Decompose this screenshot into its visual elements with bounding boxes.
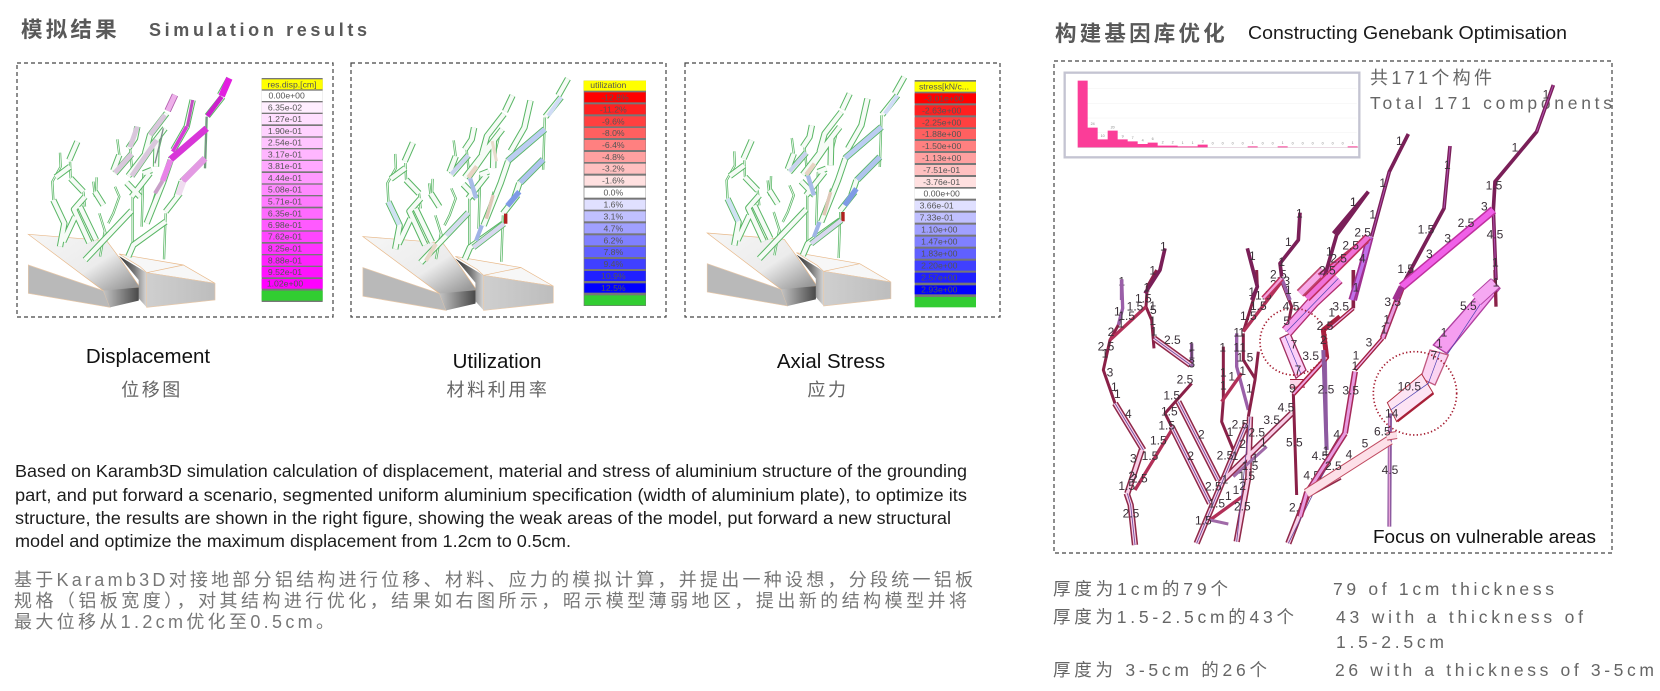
thickness labels: lower left: 1 bbox=[1246, 382, 1253, 396]
legend: stress scale: -7.51e-01 bbox=[923, 165, 960, 175]
thickness labels: upper right: 1 bbox=[1444, 158, 1451, 172]
thickness labels: lower left: 2.5 bbox=[1177, 372, 1194, 386]
thickness labels: lower left: 4.5 bbox=[1303, 468, 1320, 482]
legend: stress scale: -1.13e+00 bbox=[922, 153, 961, 163]
thickness labels: lower left: 1 bbox=[1220, 366, 1227, 380]
legend: stress scale: -3.76e-01 bbox=[923, 177, 960, 187]
thickness labels: lower left: 4 bbox=[1125, 407, 1132, 421]
thickness labels: lower right: 1 bbox=[1328, 306, 1335, 320]
thickness labels: lower right: 3.5 bbox=[1332, 300, 1349, 314]
caption: utilization bbox=[446, 350, 550, 400]
thickness labels: lower left: 1 bbox=[1220, 378, 1227, 392]
thickness labels: lower right: 10.5 bbox=[1398, 380, 1421, 394]
thickness labels: upper right: 1 bbox=[1512, 140, 1519, 154]
legend: displacement scale: 8.88e-01 bbox=[268, 255, 302, 265]
thickness labels: upper right: 1 bbox=[1369, 207, 1376, 221]
bar chart: component count histogram: 0 bbox=[1262, 142, 1264, 146]
legend: utilization scale: -11.2% bbox=[600, 104, 627, 114]
thickness labels: lower left: 1 bbox=[1233, 341, 1240, 355]
thickness labels: lower left: 8.5 bbox=[1307, 276, 1324, 290]
bar chart: component count histogram: 0 bbox=[1312, 142, 1314, 146]
bar chart: component count histogram: 0 bbox=[1332, 142, 1334, 146]
text: total components: 共171个构件 bbox=[1370, 68, 1492, 88]
legend: stress scale: 1.83e+00 bbox=[921, 249, 958, 259]
thickness labels: lower left: 2 bbox=[1270, 278, 1277, 292]
legend: utilization scale: 12.5% bbox=[601, 283, 626, 293]
thickness labels: lower right: 5.5 bbox=[1460, 299, 1477, 313]
thickness labels: upper left: 1 bbox=[1143, 281, 1150, 295]
legend: stress scale: 7.33e-01 bbox=[920, 213, 954, 223]
caption: axial stress: Axial Stress bbox=[777, 350, 885, 373]
bar chart: component count histogram: 10 bbox=[1101, 134, 1105, 138]
thickness labels: lower left: 2.5 bbox=[1289, 501, 1306, 515]
legend: displacement scale: res.disp.[cm] bbox=[267, 79, 317, 89]
bar chart: component count histogram: 1 bbox=[1352, 141, 1354, 145]
thickness labels: upper right: 1.5 bbox=[1397, 262, 1414, 276]
thickness labels: upper right: 3 bbox=[1481, 199, 1488, 213]
thickness labels: lower left: 1 bbox=[1188, 340, 1195, 354]
thickness labels: lower left: 2 bbox=[1320, 333, 1327, 347]
legend: displacement scale: 0.00e+00 bbox=[268, 91, 305, 101]
thickness labels: upper right: 1 bbox=[1492, 256, 1499, 270]
model: axial stress structure on terrain bbox=[707, 77, 904, 306]
bar chart: component count histogram: 0 bbox=[1212, 142, 1214, 146]
thickness labels: lower left: 1 bbox=[1114, 387, 1121, 401]
legend: utilization scale: -6.4% bbox=[602, 140, 625, 150]
legend: displacement scale bbox=[262, 78, 323, 302]
legend: displacement scale: 6.35e-02 bbox=[268, 102, 302, 112]
title: constructing genebank optimisation: 构建基因库优化 bbox=[1055, 22, 1228, 46]
thickness labels: upper left: 1 bbox=[1278, 255, 1285, 269]
thickness labels: upper right: 1 bbox=[1543, 88, 1550, 102]
model: lower right structure with thickness labels bbox=[1300, 270, 1500, 527]
thickness labels: upper left: 2.5 bbox=[1342, 239, 1359, 253]
thickness labels: lower left: 2 bbox=[1187, 449, 1194, 463]
title: simulation results bbox=[21, 18, 367, 42]
thickness labels: lower left: 3 bbox=[1283, 274, 1290, 288]
legend: displacement scale: 3.17e-01 bbox=[268, 149, 302, 159]
thickness labels: lower left: 1.5 bbox=[1208, 496, 1225, 510]
thickness labels: lower right: 1 bbox=[1436, 336, 1443, 350]
text block: english description: structure, the results are shown in the right figure, showing the weak areas of the model, put forward a new structural bbox=[15, 508, 951, 528]
thickness labels: lower left: 1.5 bbox=[1158, 418, 1175, 432]
thickness labels: lower left: 3 bbox=[1107, 366, 1114, 380]
model: displacement structure on terrain bbox=[28, 78, 229, 307]
thickness labels: lower left: 7 bbox=[1291, 338, 1298, 352]
legend: utilization scale: -9.6% bbox=[602, 116, 625, 126]
member: 5.5 plate bbox=[1433, 279, 1500, 353]
member: thick plate in first focus circle bbox=[1280, 333, 1306, 378]
bar chart: component count histogram: 0 bbox=[1292, 142, 1294, 146]
thickness labels: lower left: 2.5 bbox=[1232, 418, 1249, 432]
thickness labels: upper left: 1 bbox=[1285, 235, 1292, 249]
bar chart: component count histogram: 1 bbox=[1192, 141, 1194, 145]
legend: utilization scale: 7.8% bbox=[603, 247, 623, 257]
legend: stress scale: 2.20e+00 bbox=[921, 261, 958, 271]
thickness labels: upper left: 1 bbox=[1285, 283, 1292, 297]
thickness labels: lower right: 1 bbox=[1383, 312, 1390, 326]
member: 7 plate bbox=[1421, 350, 1448, 385]
legend: utilization scale: utilization bbox=[590, 80, 627, 90]
bar chart: component count histogram: 7 bbox=[1132, 136, 1134, 140]
thickness labels: lower right: 3 bbox=[1366, 336, 1373, 350]
thickness labels: lower left: 5.5 bbox=[1286, 436, 1303, 450]
legend: displacement scale: 1.27e-01 bbox=[268, 114, 302, 124]
thickness labels: lower left: 2 bbox=[1198, 428, 1205, 442]
legend: utilization scale: 6.2% bbox=[603, 235, 623, 245]
thickness labels: lower left: 1 bbox=[1233, 326, 1240, 340]
thickness labels: lower left: 2 bbox=[1239, 437, 1246, 451]
thickness labels: lower left: 1 bbox=[1225, 489, 1232, 503]
thickness labels: upper left: 1 bbox=[1249, 249, 1256, 263]
thickness labels: lower right: 7 bbox=[1431, 348, 1438, 362]
legend: stress scale: 2.57e+00 bbox=[921, 273, 958, 283]
thickness labels: lower left: 9 bbox=[1289, 382, 1296, 396]
thickness labels: lower left: 3.5 bbox=[1263, 413, 1280, 427]
legend: displacement scale: 9.52e-01 bbox=[268, 267, 302, 277]
thickness labels: lower right: 3.5 bbox=[1342, 383, 1359, 397]
legend: utilization scale: 10.9% bbox=[601, 271, 626, 281]
legend: utilization scale: 1.6% bbox=[603, 200, 623, 210]
text block: english description: part, and put forward a scenario, segmented uniform aluminium specification (width of aluminium plate), to optimize its bbox=[15, 485, 967, 505]
thickness labels: upper right: 1 bbox=[1350, 195, 1357, 209]
thickness labels: lower left bbox=[1098, 268, 1329, 528]
legend: stress scale bbox=[915, 80, 976, 307]
thickness labels: upper left bbox=[1143, 195, 1371, 297]
bar chart: component count histogram: 3 bbox=[1202, 139, 1204, 143]
thickness labels: lower left: 2.5 bbox=[1217, 448, 1234, 462]
thickness labels: lower left: 1.5 bbox=[1237, 351, 1254, 365]
bar chart: component count histogram: 0 bbox=[1322, 142, 1324, 146]
thickness labels: lower right: 1 bbox=[1353, 348, 1360, 362]
legend: displacement scale: 6.35e-01 bbox=[268, 208, 302, 218]
thickness labels: lower left: 1 bbox=[1260, 436, 1267, 450]
thickness labels: lower left: 4.5 bbox=[1278, 400, 1295, 414]
legend: stress scale: -1.88e+00 bbox=[922, 129, 961, 139]
caption: axial stress: 应力 bbox=[807, 380, 849, 400]
thickness labels: upper left: 1 bbox=[1160, 240, 1167, 254]
thickness labels: upper right: 2.5 bbox=[1458, 216, 1475, 230]
thickness labels: lower left: 1 bbox=[1118, 316, 1125, 330]
text block: english description bbox=[15, 461, 967, 551]
thickness labels: lower left: 2.5 bbox=[1234, 500, 1251, 514]
thickness labels: lower left: 1 bbox=[1248, 285, 1255, 299]
thickness labels: lower right: 2.5 bbox=[1318, 382, 1335, 396]
thickness labels: lower right: 1 bbox=[1323, 444, 1330, 458]
bar chart: component count histogram: 20 bbox=[1111, 125, 1115, 129]
thickness labels: lower right: 2.5 bbox=[1325, 459, 1342, 473]
bar chart: component count histogram: 1 bbox=[1252, 141, 1254, 145]
thickness labels: lower left: 1.5 bbox=[1118, 479, 1135, 493]
thickness labels: lower left: 2.5 bbox=[1131, 471, 1148, 485]
legend: utilization scale: -1.6% bbox=[602, 176, 625, 186]
bar chart: component count histogram: 4 bbox=[1142, 139, 1144, 143]
bar chart: component count histogram: 0 bbox=[1222, 142, 1224, 146]
thickness labels: lower right: 3.5 bbox=[1384, 295, 1401, 309]
thickness labels: lower right: 1 bbox=[1353, 279, 1360, 293]
text block: chinese description: 基于Karamb3D对接地部分铝结构进行位移、材料、应力的模拟计算，并提出一种设想，分段统一铝板 bbox=[14, 570, 973, 590]
thickness labels: upper right: 4.5 bbox=[1487, 228, 1504, 242]
thickness labels: lower right: 1 bbox=[1350, 289, 1357, 303]
thickness labels: lower left: 1 bbox=[1232, 449, 1239, 463]
legend: utilization scale: -8.0% bbox=[602, 128, 625, 138]
thickness labels: lower left: 1.5 bbox=[1238, 469, 1255, 483]
text block: thickness summary: 1.5-2.5cm bbox=[1336, 632, 1444, 652]
bar chart: component count histogram: 24 bbox=[1091, 122, 1095, 126]
callout: focus on vulnerable areas: Focus on vulnerable areas bbox=[1373, 527, 1596, 547]
bar chart: component count histogram: 0 bbox=[1302, 142, 1304, 146]
caption: displacement: Displacement bbox=[86, 345, 210, 368]
bar chart: component count histogram: 0 bbox=[1272, 142, 1274, 146]
title: constructing genebank optimisation: Constructing Genebank Optimisation bbox=[1248, 23, 1567, 43]
thickness labels: lower left: 1 bbox=[1149, 314, 1156, 328]
thickness labels: lower right bbox=[1317, 279, 1477, 477]
model: lower left structure with thickness labels bbox=[1098, 268, 1340, 545]
thickness labels: lower right: 5 bbox=[1362, 436, 1369, 450]
thickness labels: lower left: 1.5 bbox=[1142, 449, 1159, 463]
legend: stress scale: -1.50e+00 bbox=[922, 141, 961, 151]
thickness labels: lower left: 3 bbox=[1130, 452, 1137, 466]
caption: displacement: 位移图 bbox=[121, 380, 183, 400]
thickness labels: lower left: 1 bbox=[1151, 324, 1158, 338]
thickness labels: lower left: 1.5 bbox=[1118, 309, 1135, 323]
text block: english description: model and optimize the maximum displacement from 1.2cm to 0.5cm. bbox=[15, 531, 571, 551]
thickness labels: lower left: 1 bbox=[1188, 348, 1195, 362]
legend: utilization scale: -3.2% bbox=[602, 164, 625, 174]
thickness labels: upper right bbox=[1350, 88, 1550, 290]
text block: thickness summary: 厚度为 3-5cm 的26个 bbox=[1053, 660, 1267, 680]
legend: stress scale: stress[kN/c... bbox=[919, 81, 969, 91]
thickness labels: lower left: 3.5 bbox=[1302, 349, 1319, 363]
thickness labels: lower left: 2.5 bbox=[1205, 480, 1222, 494]
thickness labels: upper left: 2.5 bbox=[1330, 252, 1347, 266]
text: total components bbox=[1370, 68, 1612, 113]
thickness labels: lower left: 1 bbox=[1219, 341, 1226, 355]
thickness labels: lower left: 2.5 bbox=[1270, 268, 1287, 282]
model: utilization structure on terrain bbox=[363, 79, 568, 310]
legend: displacement scale: 5.71e-01 bbox=[268, 196, 302, 206]
thickness labels: upper left: 2.5 bbox=[1319, 264, 1336, 278]
thickness labels: lower left: 1.5 bbox=[1250, 299, 1267, 313]
legend: stress scale: 1.10e+00 bbox=[921, 225, 958, 235]
thickness labels: lower left: 1 bbox=[1114, 304, 1121, 318]
thickness labels: lower left: 5 bbox=[1283, 314, 1290, 328]
thickness labels: lower left: 1.5 bbox=[1127, 300, 1144, 314]
thickness labels: upper right: 1 bbox=[1379, 176, 1386, 190]
thickness labels: lower right: 6.5 bbox=[1374, 424, 1391, 438]
bar chart: component count histogram: 6 bbox=[1152, 137, 1154, 141]
legend: utilization scale: 3.1% bbox=[603, 211, 623, 221]
bar chart: component count histogram: 0 bbox=[1342, 142, 1344, 146]
thickness labels: lower left: 1.5 bbox=[1255, 288, 1272, 302]
thickness labels: lower left: 1.5 bbox=[1242, 459, 1259, 473]
bar chart: component count histogram: 1 bbox=[1182, 141, 1184, 145]
text block: chinese description bbox=[14, 570, 973, 632]
legend: displacement scale: 1.02e+00 bbox=[267, 279, 303, 289]
thickness labels: lower left: 1 bbox=[1228, 370, 1235, 384]
panel: axial stress bbox=[685, 63, 1000, 317]
thickness labels: lower left: 1 bbox=[1239, 364, 1246, 378]
bar chart: component count histogram bbox=[1065, 73, 1359, 157]
legend: utilization scale: -12.8% bbox=[601, 92, 629, 102]
thickness labels: lower left: 3 bbox=[1188, 356, 1195, 370]
thickness labels: lower left: 1 bbox=[1233, 483, 1240, 497]
legend: displacement scale: 4.44e-01 bbox=[268, 173, 302, 183]
model: upper right structure with thickness labels bbox=[1320, 85, 1553, 300]
thickness labels: upper left: 1 bbox=[1296, 206, 1303, 220]
thickness labels: upper left: 1 bbox=[1353, 281, 1360, 295]
bar chart: component count histogram: 2 bbox=[1162, 140, 1164, 144]
thickness labels: lower left: 1 bbox=[1238, 326, 1245, 340]
caption: utilization: 材料利用率 bbox=[446, 380, 550, 400]
thickness labels: lower right: 1 bbox=[1441, 326, 1448, 340]
bar chart: component count histogram: 2 bbox=[1172, 140, 1174, 144]
legend: displacement scale: 5.08e-01 bbox=[268, 185, 302, 195]
thickness labels: lower right: 2.5 bbox=[1317, 319, 1334, 333]
thickness labels: lower left: 2.5 bbox=[1164, 333, 1181, 347]
title: constructing genebank optimisation bbox=[1055, 22, 1567, 46]
thickness labels: lower left: 1.5 bbox=[1163, 388, 1180, 402]
thickness labels: lower left: 1 bbox=[1111, 380, 1118, 394]
caption: utilization: Utilization bbox=[453, 350, 541, 373]
thickness labels: lower left: 2.5 bbox=[1098, 340, 1115, 354]
thickness labels: upper right: 1.5 bbox=[1418, 222, 1435, 236]
legend: stress scale: 3.66e-01 bbox=[920, 201, 954, 211]
text block: chinese description: 规格（铝板宽度），对其结构进行优化，结果如右图所示，昭示模型薄弱地区，提出新的结构模型并将 bbox=[14, 591, 967, 611]
thickness labels: upper right: 1 bbox=[1396, 134, 1403, 148]
legend: stress scale: 2.93e+00 bbox=[921, 285, 958, 295]
thickness labels: lower left: 1 bbox=[1222, 472, 1229, 486]
thickness labels: lower left: 2.5 bbox=[1123, 506, 1140, 520]
legend: stress scale: 0.00e+00 bbox=[923, 189, 960, 199]
legend: displacement scale: 3.81e-01 bbox=[268, 161, 302, 171]
panel: utilization bbox=[351, 63, 666, 317]
legend: stress scale: -3.01e+00 bbox=[924, 93, 964, 103]
thickness labels: upper right: 1.5 bbox=[1486, 179, 1503, 193]
thickness labels: upper left: 1 bbox=[1326, 244, 1333, 258]
legend: stress scale: -2.63e+00 bbox=[922, 105, 961, 115]
thickness labels: lower left: 1 bbox=[1102, 346, 1109, 360]
bar chart: component count histogram: 1 bbox=[1282, 141, 1284, 145]
thickness labels: lower right: 14 bbox=[1385, 406, 1399, 420]
thickness labels: upper left: 4 bbox=[1359, 252, 1366, 266]
panel: displacement bbox=[17, 63, 333, 317]
text block: thickness summary: 厚度为1cm的79个 bbox=[1053, 579, 1228, 599]
thickness labels: lower left: 1 bbox=[1239, 341, 1246, 355]
text: total components: Total 171 components bbox=[1370, 93, 1612, 113]
legend: displacement scale: 2.54e-01 bbox=[268, 138, 302, 148]
legend: utilization scale bbox=[584, 80, 646, 306]
legend: displacement scale: 6.98e-01 bbox=[268, 220, 302, 230]
thickness labels: lower right: 1 bbox=[1352, 359, 1359, 373]
thickness labels: lower left: 2 bbox=[1239, 479, 1246, 493]
thickness labels: lower left: 1.5 bbox=[1195, 514, 1212, 528]
thickness labels: lower left: 5 bbox=[1150, 303, 1157, 317]
legend: utilization scale: 9.4% bbox=[603, 259, 623, 269]
caption: axial stress bbox=[777, 350, 885, 400]
thickness labels: lower left: 5 bbox=[1315, 470, 1322, 484]
text block: thickness summary: 26 with a thickness of 3-5cm bbox=[1335, 660, 1654, 680]
member: 10.5 plate bbox=[1387, 374, 1433, 422]
legend: stress scale: -2.25e+00 bbox=[922, 117, 961, 127]
panel: genebank optimisation bbox=[1054, 61, 1612, 553]
caption: displacement bbox=[86, 345, 210, 400]
legend: displacement scale: 1.90e-01 bbox=[268, 126, 302, 136]
text block: chinese description: 最大位移从1.2cm优化至0.5cm。 bbox=[14, 612, 334, 632]
thickness labels: lower left: 7 bbox=[1295, 363, 1302, 377]
thickness labels: lower left: 4.5 bbox=[1283, 300, 1300, 314]
thickness labels: lower left: 1.5 bbox=[1135, 292, 1152, 306]
text block: thickness summary bbox=[1053, 579, 1654, 680]
thickness labels: lower left: 1.5 bbox=[1150, 434, 1167, 448]
thickness labels: lower left: 2 bbox=[1108, 325, 1115, 339]
title: simulation results: Simulation results bbox=[149, 20, 367, 40]
thickness labels: upper left: 2.5 bbox=[1354, 226, 1371, 240]
thickness labels: lower left: 1 bbox=[1118, 274, 1125, 288]
text block: english description: Based on Karamb3D simulation calculation of displacement, material and stress of aluminium structure of the grounding bbox=[15, 461, 967, 481]
thickness labels: upper right: 3 bbox=[1426, 247, 1433, 261]
thickness labels: lower left: 2 bbox=[1128, 469, 1135, 483]
thickness labels: upper right: 1 bbox=[1493, 276, 1500, 290]
thickness labels: upper left: 1 bbox=[1149, 263, 1156, 277]
thickness labels: lower left: 1.5 bbox=[1161, 405, 1178, 419]
legend: utilization scale: 4.7% bbox=[603, 223, 623, 233]
title: simulation results: 模拟结果 bbox=[21, 18, 120, 42]
thickness labels: lower left: 1 bbox=[1227, 425, 1234, 439]
thickness labels: lower right: 4 bbox=[1333, 427, 1340, 441]
thickness labels: lower left: 1.5 bbox=[1240, 309, 1257, 323]
thickness labels: lower left: 1 bbox=[1149, 299, 1156, 313]
thickness labels: upper left: 1 bbox=[1350, 195, 1357, 209]
legend: displacement scale: 7.62e-01 bbox=[268, 232, 302, 242]
thickness labels: lower left: 4.5 bbox=[1312, 449, 1329, 463]
thickness labels: lower right: 4 bbox=[1346, 448, 1353, 462]
thickness labels: lower right: 1 bbox=[1381, 322, 1388, 336]
legend: utilization scale: 0.0% bbox=[603, 188, 623, 198]
model: upper left structure with thickness labels bbox=[1122, 192, 1371, 300]
legend: stress scale: 1.47e+00 bbox=[921, 237, 958, 247]
bar chart: component count histogram: 0 bbox=[1232, 142, 1234, 146]
bar chart: component count histogram: 9 bbox=[1122, 134, 1124, 138]
legend: displacement scale: 8.25e-01 bbox=[268, 244, 302, 254]
thickness labels: lower right: 4.5 bbox=[1382, 463, 1399, 477]
text block: thickness summary: 43 with a thickness of bbox=[1336, 607, 1583, 627]
legend: utilization scale: -4.8% bbox=[602, 152, 625, 162]
text block: thickness summary: 厚度为1.5-2.5cm的43个 bbox=[1053, 607, 1294, 627]
thickness labels: upper right: 3 bbox=[1444, 232, 1451, 246]
bar chart: component count histogram: 0 bbox=[1242, 142, 1244, 146]
thickness labels: lower left: 2.5 bbox=[1248, 426, 1265, 440]
thickness labels: lower left: 1 bbox=[1252, 451, 1259, 465]
text block: thickness summary: 79 of 1cm thickness bbox=[1333, 579, 1554, 599]
